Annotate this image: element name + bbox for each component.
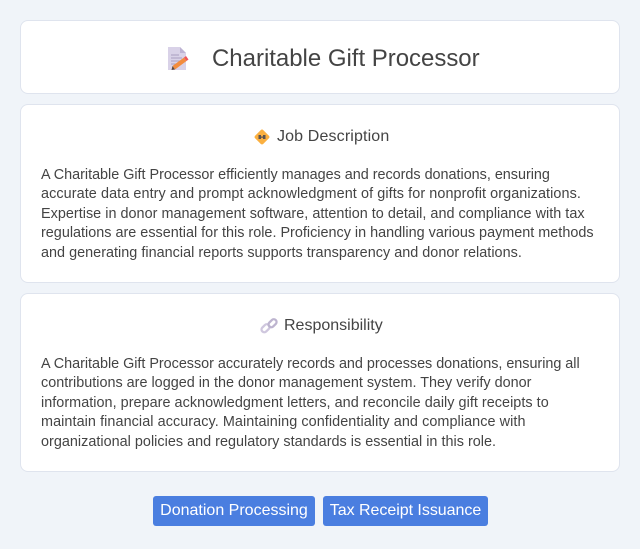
- tag: tax receipt issuance: [323, 496, 488, 526]
- text block: responsibility: A Charitable Gift Processor accurately records and processes donations, ensuring all: [41, 356, 580, 372]
- heading: job description: Job Description: [277, 128, 389, 145]
- icon: chain link: [260, 318, 278, 334]
- panel: job description: [20, 104, 620, 283]
- text block: job description: and generating financial reports supports transparency and donor relations.: [41, 245, 522, 261]
- text block: responsibility: organizational policies and regulatory standards is essential in this role.: [41, 434, 496, 450]
- text block: responsibility: maintain financial accuracy. Maintaining confidentiality and compliance with: [41, 414, 526, 430]
- heading: responsibility: Responsibility: [284, 317, 383, 334]
- text block: job description: accurate data entry and prompt acknowledgment of gifts for nonprofit organizations.: [41, 186, 581, 202]
- icon: document with pencil: [168, 47, 188, 70]
- text block: job description: Expertise in donor management software, attention to detail, and compliance with tax: [41, 206, 585, 222]
- panel: responsibility: [20, 293, 620, 472]
- tag: tax receipt issuance: Tax Receipt Issuance: [330, 502, 481, 519]
- icon: orange diamond: [254, 130, 270, 144]
- tag: donation processing: [153, 496, 315, 526]
- text block: job description: A Charitable Gift Processor efficiently manages and records donations, ensuring: [41, 167, 550, 183]
- title text: Charitable Gift Processor: [212, 45, 480, 72]
- text block: responsibility: [41, 356, 580, 450]
- text block: job description: [41, 167, 594, 261]
- text block: responsibility: contributions are logged in the donor management system. They verify donor: [41, 375, 531, 391]
- text block: responsibility: information, prepare acknowledgment letters, and reconcile daily gift receipts to: [41, 395, 549, 411]
- panel: title: [20, 20, 620, 94]
- tag: donation processing: Donation Processing: [160, 502, 308, 519]
- text block: job description: regulations are essential for this role. Proficiency in handling various payment methods: [41, 225, 594, 241]
